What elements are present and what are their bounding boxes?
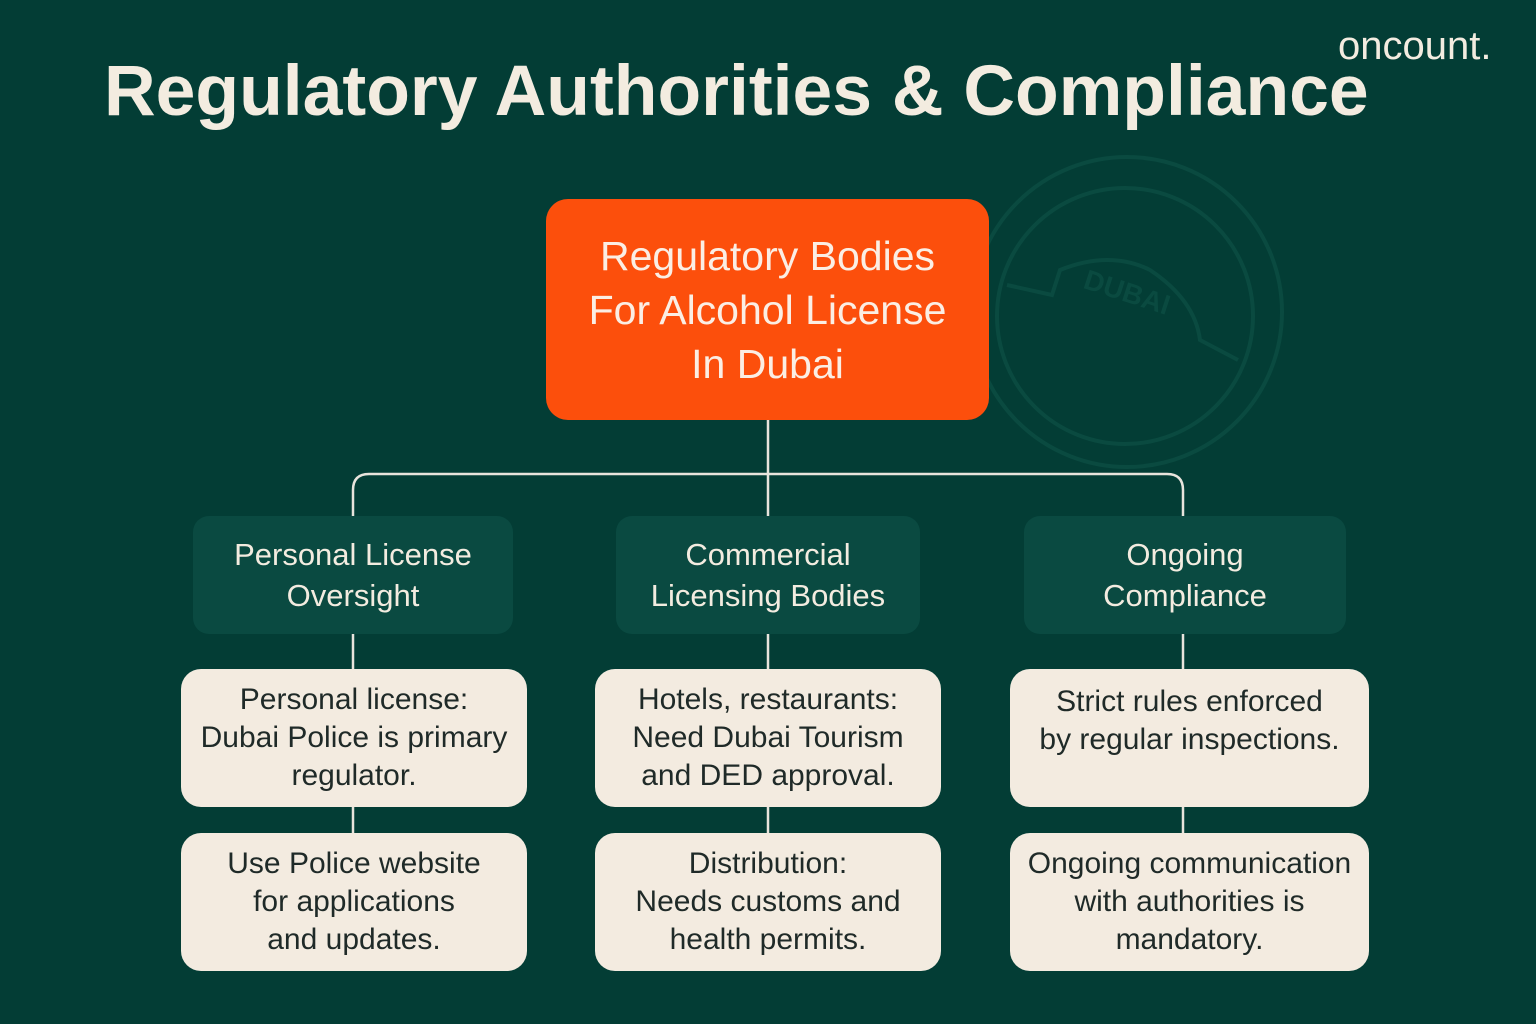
header: commercial: Licensing Bodies <box>651 578 885 613</box>
header: personal <box>193 516 513 634</box>
card 1a: Dubai Police is primary <box>201 721 507 754</box>
header: personal: Personal License <box>234 537 472 572</box>
card 1b: for applications <box>253 885 455 918</box>
background stamp: DUBAI <box>1080 264 1174 321</box>
card 2a: Need Dubai Tourism <box>632 721 904 754</box>
card 2a: and DED approval. <box>641 759 895 792</box>
connectors <box>353 420 1183 833</box>
header: personal: Oversight <box>287 578 419 613</box>
header: ongoing: Compliance <box>1103 578 1267 613</box>
logo: oncount. <box>1338 24 1491 68</box>
main box <box>546 199 989 420</box>
card 2b: health permits. <box>670 923 866 956</box>
header: ongoing <box>1024 516 1346 634</box>
card 2b: Distribution: <box>689 847 847 880</box>
card 1b: and updates. <box>267 923 441 956</box>
main box: Regulatory Bodies <box>600 232 935 278</box>
card 1b: Use Police website <box>227 847 481 880</box>
card 2a: Hotels, restaurants: <box>638 683 898 716</box>
main box: For Alcohol License <box>589 286 946 332</box>
card 1a <box>181 669 527 807</box>
card 3a: by regular inspections. <box>1039 723 1340 756</box>
card 2b: Needs customs and <box>635 885 901 918</box>
card 3b: mandatory. <box>1116 923 1263 956</box>
main box: In Dubai <box>691 340 844 386</box>
card 1b <box>181 833 527 971</box>
card 3b <box>1010 833 1369 971</box>
card 3a <box>1010 669 1369 807</box>
card 2b <box>595 833 941 971</box>
card 1a: regulator. <box>291 759 417 792</box>
card 2a <box>595 669 941 807</box>
card 3a: Strict rules enforced <box>1056 685 1323 718</box>
card 1a: Personal license: <box>240 683 468 716</box>
header: ongoing: Ongoing <box>1126 537 1244 572</box>
card 3b: Ongoing communication <box>1028 847 1351 880</box>
header: commercial: Commercial <box>685 537 851 572</box>
card 3b: with authorities is <box>1074 885 1305 918</box>
title: Regulatory Authorities & Compliance <box>104 51 1369 131</box>
header: commercial <box>616 516 920 634</box>
